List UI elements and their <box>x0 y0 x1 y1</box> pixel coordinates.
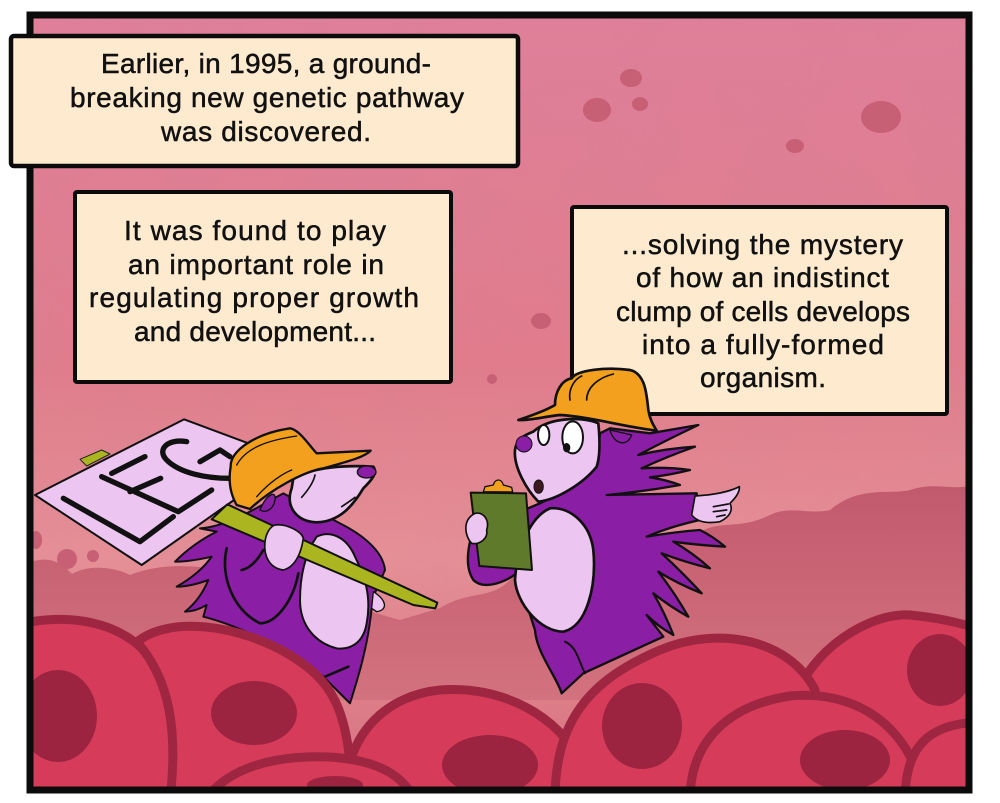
caption: role in growth: and development... <box>134 316 376 347</box>
caption: earlier in 1995: was discovered. <box>160 116 371 147</box>
hedgehog eyes <box>538 421 583 453</box>
floating cell blotches <box>30 69 901 569</box>
cell bottom small <box>210 752 412 786</box>
caption: solving the mystery: ...solving the mystery <box>622 229 903 260</box>
caption: role in growth <box>75 192 451 382</box>
mole hard hat <box>230 428 371 509</box>
cell corner <box>901 718 966 786</box>
wooden stake <box>212 504 437 608</box>
caption: solving the mystery: of how an indistinct <box>636 262 889 293</box>
hedgehog hard hat <box>518 369 657 431</box>
hedgehog mouth <box>534 480 543 493</box>
character: hedgehog with clipboard <box>466 369 739 693</box>
caption: solving the mystery: into a fully-formed <box>642 329 884 360</box>
character: mole with sign <box>35 419 437 703</box>
cell centre-left <box>137 626 352 800</box>
hedgehog hand on clipboard <box>466 513 488 544</box>
cell centre <box>352 685 563 786</box>
mole arm line <box>225 548 348 677</box>
sign: LEG <box>35 419 247 565</box>
caption: role in growth: regulating proper growth <box>89 282 419 313</box>
background tissue hills <box>30 486 969 700</box>
mole hand behind <box>372 592 384 612</box>
mole belly <box>300 534 368 649</box>
mole hand <box>265 525 303 570</box>
hedgehog head <box>515 419 599 502</box>
cell left <box>34 614 168 786</box>
cell right upper <box>806 610 966 750</box>
caption: earlier in 1995: Earlier, in 1995, a ground- <box>101 48 431 79</box>
cell centre-right <box>555 638 815 800</box>
hedgehog pointing hand <box>692 487 739 523</box>
caption: earlier in 1995 <box>11 36 518 166</box>
caption: solving the mystery: clump of cells develops <box>616 296 910 327</box>
hedgehog belly <box>515 508 594 632</box>
caption: role in growth: It was found to play <box>124 215 386 246</box>
caption: role in growth: an important role in <box>128 249 384 280</box>
caption: solving the mystery: organism. <box>700 362 826 393</box>
foreground cells <box>15 615 985 800</box>
hedgehog body and spines <box>468 425 725 693</box>
mole head <box>290 466 375 522</box>
hedgehog ear <box>610 430 632 443</box>
caption: earlier in 1995: breaking new genetic pathway <box>70 82 464 113</box>
mole body <box>175 493 385 703</box>
caption: solving the mystery <box>572 207 947 414</box>
clipboard <box>483 480 513 492</box>
cell bottom right <box>686 690 912 786</box>
